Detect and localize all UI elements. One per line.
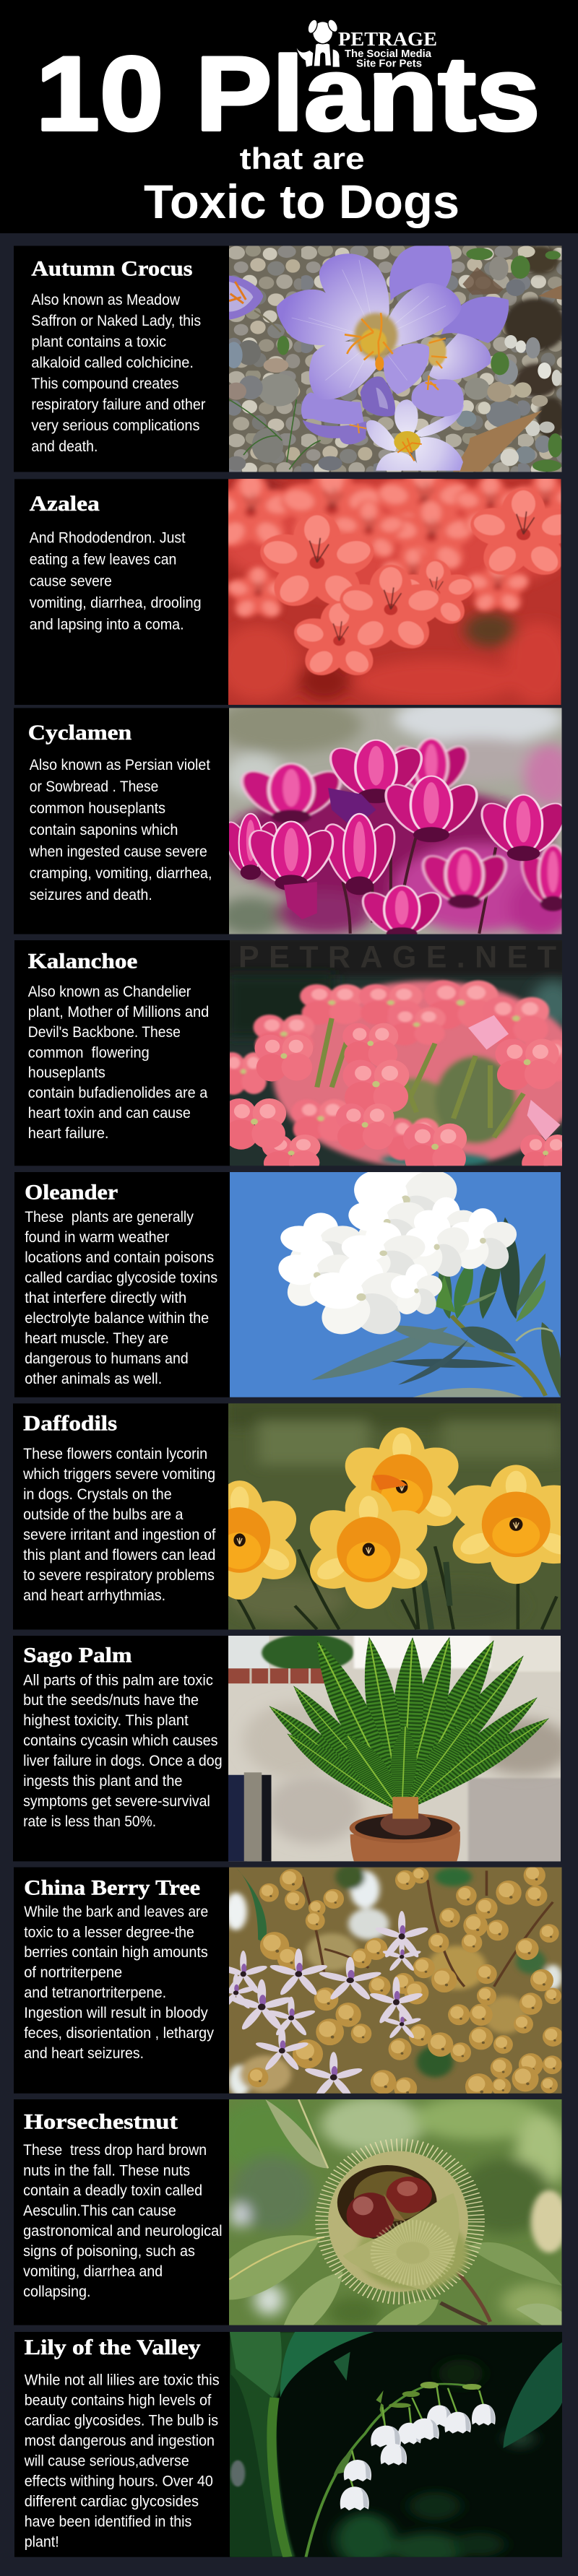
description: Oleander: called cardiac glycoside toxins [25, 1270, 217, 1286]
panel: Kalanchoe [14, 937, 578, 1175]
description: Horsechestnut: vomiting, diarrhea and [23, 2263, 163, 2280]
description: China Berry Tree: While the bark and leaves are [24, 1904, 208, 1920]
photo: autumn crocus flowers on gravel [225, 246, 566, 474]
description: Lily of the Valley: most dangerous and ingestion [25, 2433, 215, 2450]
description: Daffodils: These flowers contain lycorin [23, 1446, 207, 1462]
description: Cyclamen: Also known as Persian violet [30, 757, 210, 773]
description: Sago Palm: contains cycasin which causes [23, 1732, 217, 1749]
description: Cyclamen: when ingested cause severe [29, 844, 207, 860]
description: Autumn Crocus: respiratory failure and other [31, 396, 205, 413]
description: Lily of the Valley: will cause serious,adverse [24, 2453, 189, 2470]
description: China Berry Tree: feces, disorientation , lethargy [24, 2025, 214, 2042]
description: Horsechestnut: Aesculin.This can cause [23, 2203, 176, 2219]
photo: yellow daffodils [228, 1403, 561, 1629]
panel: Daffodils [13, 1399, 578, 1634]
description: Daffodils: in dogs. Crystals on the [23, 1486, 172, 1503]
description: Azalea: cause severe [30, 573, 112, 590]
description: Daffodils: severe irritant and ingestion of [23, 1527, 216, 1543]
description: Horsechestnut: gastronomical and neurological [23, 2223, 223, 2239]
photo: lily of the valley bells [225, 2330, 568, 2566]
heading: Azalea: Azalea [30, 492, 100, 516]
logo: Petrage dog: Site For Pets [356, 58, 422, 69]
description: Sago Palm: liver failure in dogs. Once a dog [23, 1753, 223, 1769]
description: Cyclamen: or Sowbread . These [30, 779, 158, 795]
description: Azalea: eating a few leaves can [30, 551, 176, 568]
description: Daffodils: and heart arrhythmias. [23, 1587, 165, 1604]
photo: china berry tree berries and flowers [229, 1868, 562, 2094]
description: Sago Palm: highest toxicity. This plant [23, 1712, 189, 1729]
description: Kalanchoe: heart failure. [28, 1125, 108, 1142]
description: Autumn Crocus: Saffron or Naked Lady, this [31, 313, 201, 329]
description: Horsechestnut [23, 2142, 223, 2300]
description: Lily of the Valley: plant! [25, 2534, 59, 2551]
description: Oleander: dangerous to humans and [25, 1350, 189, 1367]
logo: Petrage dog [297, 18, 437, 69]
description: Azalea: vomiting, diarrhea, drooling [30, 595, 202, 612]
description: Autumn Crocus: alkaloid called colchicine. [31, 355, 194, 371]
description: Kalanchoe: Devil's Backbone. These [28, 1024, 181, 1041]
description: China Berry Tree: Ingestion will result in bloody [24, 2005, 208, 2021]
subtitle: Toxic to Dogs: Toxic to Dogs [144, 175, 460, 228]
photo: pink kalanchoe with watermark [220, 937, 578, 1175]
description: Horsechestnut: nuts in the fall. These nuts [23, 2162, 190, 2179]
panel: Cyclamen [14, 708, 562, 934]
description: Azalea [30, 529, 202, 633]
description: Horsechestnut: contain a deadly toxin called [23, 2182, 202, 2199]
logo: Petrage dog: PETRAGE [338, 28, 437, 50]
description: Azalea: and lapsing into a coma. [30, 617, 184, 633]
description: China Berry Tree: toxic to a lesser degree-the [24, 1924, 194, 1940]
panel: Azalea [14, 479, 561, 705]
photo: horsechestnut burr with nuts [217, 2096, 568, 2328]
heading: Autumn Crocus: Autumn Crocus [31, 257, 192, 281]
description: China Berry Tree: berries contain high amounts [24, 1944, 208, 1961]
panel: Autumn Crocus [14, 246, 566, 474]
description: Lily of the Valley: have been identified in this [25, 2514, 191, 2531]
description: Sago Palm [23, 1672, 223, 1830]
panel: China Berry Tree [14, 1861, 568, 2100]
description: Sago Palm: symptoms get severe-survival [23, 1793, 210, 1810]
heading: Oleander: Oleander [25, 1180, 118, 1204]
description: Horsechestnut: These tress drop hard brown [23, 2142, 207, 2159]
description: Sago Palm: ingests this plant and the [23, 1773, 182, 1790]
heading: Cyclamen: Cyclamen [28, 721, 132, 745]
description: Autumn Crocus [31, 292, 205, 455]
description: Autumn Crocus: Also known as Meadow [31, 292, 181, 308]
description: Autumn Crocus: plant contains a toxic [31, 334, 166, 350]
description: Oleander: These plants are generally [25, 1209, 194, 1226]
description: Cyclamen: cramping, vomiting, diarrhea, [30, 865, 212, 882]
description: Autumn Crocus: and death. [31, 438, 98, 455]
description: Lily of the Valley: While not all lilies are toxic this [25, 2372, 220, 2389]
description: Kalanchoe: houseplants [28, 1064, 105, 1081]
title: 10 Plants: 10 Plants [36, 35, 540, 152]
description: Kalanchoe: contain bufadienolides are a [28, 1085, 208, 1101]
panel: Sago Palm [13, 1631, 571, 1866]
description: China Berry Tree [24, 1904, 214, 2062]
heading: China Berry Tree: China Berry Tree [24, 1875, 200, 1899]
panel: Oleander [14, 1149, 568, 1400]
description: Kalanchoe: heart toxin and can cause [28, 1105, 191, 1122]
description: Oleander: found in warm weather [25, 1229, 169, 1246]
watermark: PETRAGE.NET: PETRAGE.NET [238, 940, 556, 974]
description: Oleander: that interfere directly with [25, 1290, 186, 1306]
photo: white oleander against blue sky [225, 1149, 568, 1400]
description: Kalanchoe: common flowering [28, 1044, 150, 1061]
photo: magenta cyclamen flowers [229, 708, 562, 934]
description: Sago Palm: All parts of this palm are toxic [23, 1672, 213, 1688]
description: Kalanchoe [28, 984, 209, 1142]
description: Cyclamen [29, 757, 212, 903]
description: Kalanchoe: Also known as Chandelier [28, 984, 191, 1000]
description: Oleander: locations and contain poisons [25, 1249, 214, 1266]
description: Lily of the Valley: effects withing hours. Over 40 [25, 2473, 213, 2490]
heading: Lily of the Valley: Lily of the Valley [25, 2336, 201, 2359]
description: Cyclamen: seizures and death. [30, 887, 152, 903]
description: Horsechestnut: collapsing. [23, 2284, 91, 2300]
description: Horsechestnut: signs of poisoning, such as [23, 2243, 195, 2260]
description: Lily of the Valley [24, 2372, 220, 2551]
description: Cyclamen: common houseplants [30, 800, 165, 817]
description: Oleander [25, 1209, 217, 1387]
heading: Daffodils: Daffodils [23, 1412, 117, 1436]
panel: Lily of the Valley [14, 2330, 568, 2566]
description: Sago Palm: rate is less than 50%. [23, 1813, 156, 1830]
description: Oleander: other animals as well. [25, 1371, 162, 1387]
header [0, 0, 578, 233]
description: Autumn Crocus: very serious complications [31, 417, 199, 434]
photo: sago palm in terracotta pot [225, 1631, 571, 1866]
logo: Petrage dog: The Social Media [345, 48, 432, 60]
description: China Berry Tree: and heart seizures. [24, 2045, 144, 2062]
description: Cyclamen: contain saponins which [30, 822, 178, 838]
description: Lily of the Valley: different cardiac glycosides [25, 2494, 199, 2510]
description: China Berry Tree: and tetranortriterpene. [24, 1985, 166, 2001]
description: Daffodils: this plant and flowers can lead [23, 1547, 215, 1564]
description: Azalea: And Rhododendron. Just [30, 529, 186, 546]
heading: Kalanchoe: Kalanchoe [28, 950, 137, 973]
heading: Horsechestnut: Horsechestnut [24, 2109, 178, 2133]
heading: Sago Palm: Sago Palm [23, 1644, 132, 1668]
description: Autumn Crocus: This compound creates [31, 376, 178, 392]
description: Sago Palm: but the seeds/nuts have the [23, 1692, 199, 1709]
description: Daffodils [22, 1446, 216, 1604]
description: Lily of the Valley: cardiac glycosides. The bulb is [25, 2413, 218, 2429]
description: Oleander: electrolyte balance within the [25, 1310, 209, 1327]
description: Oleander: heart muscle. They are [25, 1330, 168, 1347]
description: Lily of the Valley: beauty contains high levels of [25, 2393, 212, 2409]
description: Daffodils: outside of the bulbs are a [23, 1506, 184, 1523]
photo: red azalea blossoms [228, 479, 561, 705]
description: Daffodils: which triggers severe vomiting [22, 1466, 215, 1483]
subtitle: that are: that are [240, 142, 365, 175]
description: China Berry Tree: of nortriterpene [24, 1964, 122, 1981]
description: Daffodils: to severe respiratory problems [23, 1567, 215, 1584]
description: Kalanchoe: plant, Mother of Millions and [28, 1004, 209, 1020]
panel: Horsechestnut [14, 2096, 568, 2328]
